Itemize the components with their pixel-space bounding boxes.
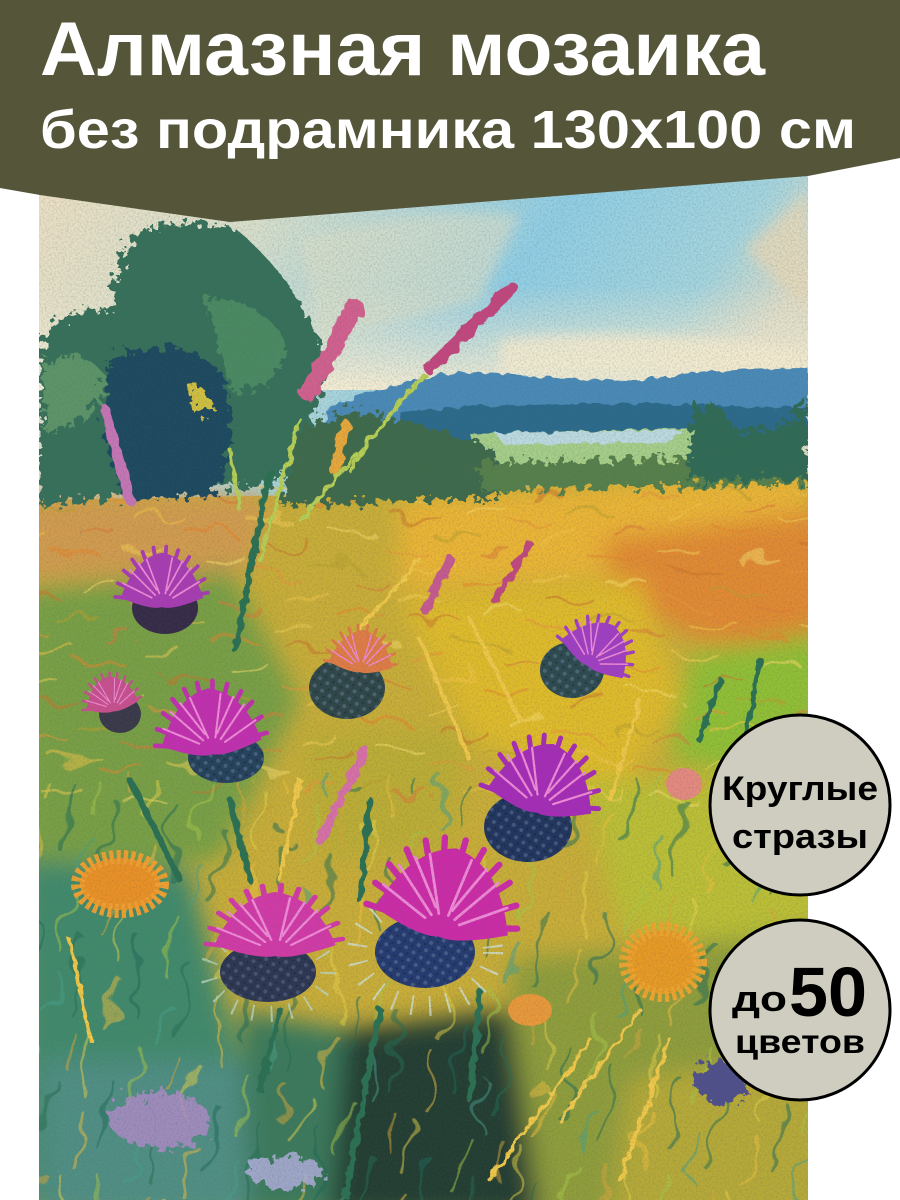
badge: up to 50 colours bbox=[710, 920, 890, 1100]
small flower far left bbox=[82, 671, 142, 733]
flower left centre bbox=[151, 677, 268, 783]
badge: up to 50 colours: цветов bbox=[735, 1023, 865, 1060]
badge: round rhinestones bbox=[710, 715, 890, 895]
pink loosestrife spikes bbox=[105, 288, 530, 840]
badge: up to 50 colours: 50 bbox=[789, 953, 867, 1031]
paint grain bbox=[39, 176, 808, 1200]
flower right centre bbox=[478, 732, 601, 862]
field colour washes bbox=[20, 470, 830, 1200]
flower bottom left bbox=[206, 885, 342, 1014]
sky bbox=[39, 176, 808, 506]
grass brush strokes, lower field bbox=[0, 780, 850, 1200]
flower right bbox=[540, 614, 636, 698]
orange flower left bbox=[78, 857, 162, 911]
flower top left bbox=[115, 547, 208, 634]
thistle flowers bbox=[77, 547, 748, 1188]
stems and foreground grasses bbox=[70, 375, 760, 1195]
distant blue hills bbox=[325, 368, 808, 468]
badge: round rhinestones: стразы bbox=[732, 818, 868, 856]
treeline behind field bbox=[280, 398, 808, 505]
pink bud right bbox=[666, 768, 702, 800]
subtitle: без подрамника 130х100 см bbox=[40, 100, 856, 160]
badge: up to 50 colours: до bbox=[732, 978, 787, 1019]
violet patch lower right bbox=[696, 1060, 748, 1104]
flower orange top bbox=[309, 622, 400, 719]
title: Алмазная мозаика bbox=[40, 7, 766, 92]
small orange flower bbox=[508, 994, 552, 1026]
lilac flowers bottom left bbox=[110, 1092, 323, 1188]
large tree group left bbox=[39, 223, 323, 505]
field base bbox=[39, 470, 808, 1200]
flower centre bottom bbox=[357, 823, 533, 1006]
orange flower right bbox=[626, 929, 700, 995]
header banner bbox=[0, 0, 900, 222]
badge: round rhinestones: Круглые bbox=[722, 770, 878, 808]
grass brush strokes, upper field bbox=[0, 480, 850, 810]
